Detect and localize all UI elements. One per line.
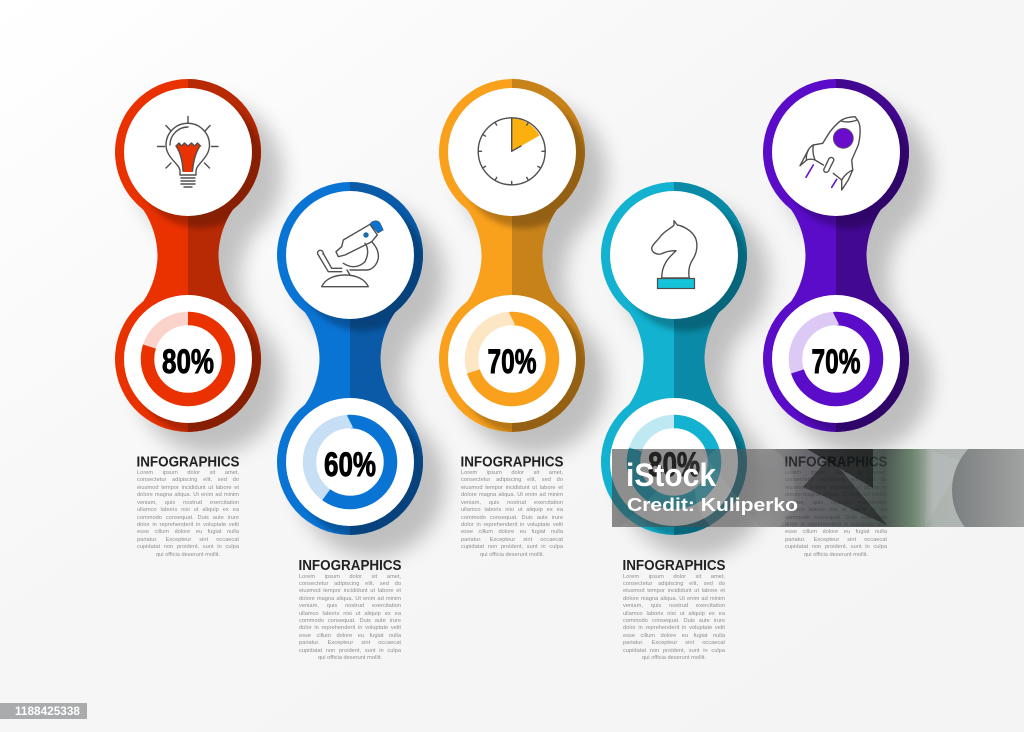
text block: consectetur adipiscing elit, sed do xyxy=(785,477,887,483)
text block: qui officia deserunt mollit. xyxy=(642,655,706,661)
text block: commodo consequat. Duis aute irure xyxy=(461,515,563,521)
text block: consectetur adipiscing elit, sed do xyxy=(299,581,401,587)
panel: orange column, clock, 70% xyxy=(439,72,607,562)
text block: veniam, quis nostrud exercitation xyxy=(623,603,725,609)
text block xyxy=(785,470,887,562)
text block: cupidatat non proident, sunt in culpa xyxy=(299,648,401,654)
donut chart: 60%: 60% xyxy=(324,446,376,484)
credit line: Credit: Kuliperko xyxy=(627,495,798,515)
text block: dolore magna aliqua. Ut enim ad minim xyxy=(137,492,239,498)
text block: esse cillum dolore eu fugiat nulla xyxy=(785,529,887,535)
text block: cupidatat non proident, sunt in culpa xyxy=(785,544,887,550)
text block: Lorem ipsum dolor sit amet, xyxy=(785,470,887,476)
iStock logo text: iStock xyxy=(626,457,716,493)
text block xyxy=(299,574,401,666)
text block: dolore magna aliqua. Ut enim ad minim xyxy=(623,596,725,602)
text block: dolor in reprehenderit in voluptate velit xyxy=(299,625,401,631)
text block: Lorem ipsum dolor sit amet, xyxy=(623,574,725,580)
text block: eiusmod tempor incididunt ut labore et xyxy=(623,588,725,594)
text block: eiusmod tempor incididunt ut labore et xyxy=(461,485,563,491)
text block: commodo consequat. Duis aute irure xyxy=(299,618,401,624)
donut chart: 60% xyxy=(310,422,390,502)
panel: red column, lightbulb, 80% xyxy=(115,72,283,562)
icon: clock xyxy=(478,118,545,185)
icon: lightbulb xyxy=(158,116,218,187)
text block: dolore magna aliqua. Ut enim ad minim xyxy=(299,596,401,602)
image id tag: 1188425338 xyxy=(15,706,81,718)
text block: ullamco laboris nisi ut aliquip ex ea xyxy=(623,611,725,617)
text block: veniam, quis nostrud exercitation xyxy=(461,500,563,506)
text block xyxy=(137,470,239,562)
text block: eiusmod tempor incididunt ut labore et xyxy=(785,485,887,491)
text block: pariatur. Excepteur sint occaecat xyxy=(299,640,401,646)
heading: INFOGRAPHICS xyxy=(460,454,564,470)
text block: pariatur. Excepteur sint occaecat xyxy=(785,537,887,543)
panel: teal column, chess knight, 80% xyxy=(601,175,769,666)
text block: qui officia deserunt mollit. xyxy=(156,552,220,558)
icon: rocket xyxy=(800,117,860,190)
text block xyxy=(461,470,563,562)
text block: veniam, quis nostrud exercitation xyxy=(137,500,239,506)
heading: INFOGRAPHICS xyxy=(622,558,726,574)
text block: esse cillum dolore eu fugiat nulla xyxy=(461,529,563,535)
donut chart: 80% xyxy=(634,422,714,502)
text block: pariatur. Excepteur sint occaecat xyxy=(137,537,239,543)
donut chart: 70%: 70% xyxy=(488,343,536,381)
text block: ullamco laboris nisi ut aliquip ex ea xyxy=(299,611,401,617)
text block: consectetur adipiscing elit, sed do xyxy=(461,477,563,483)
donut chart: 70% xyxy=(796,318,876,400)
text block: veniam, quis nostrud exercitation xyxy=(785,500,887,506)
donut chart: 80% xyxy=(148,318,228,400)
text block: consectetur adipiscing elit, sed do xyxy=(137,477,239,483)
text block: commodo consequat. Duis aute irure xyxy=(623,618,725,624)
text block: dolor in reprehenderit in voluptate velit xyxy=(785,522,887,528)
text block: consectetur adipiscing elit, sed do xyxy=(623,581,725,587)
text block xyxy=(623,574,725,666)
text block: dolore magna aliqua. Ut enim ad minim xyxy=(785,492,887,498)
text block: commodo consequat. Duis aute irure xyxy=(137,515,239,521)
text block: eiusmod tempor incididunt ut labore et xyxy=(137,485,239,491)
text block: esse cillum dolore eu fugiat nulla xyxy=(299,633,401,639)
icon: chess knight xyxy=(652,221,697,288)
text block: dolor in reprehenderit in voluptate velit xyxy=(461,522,563,528)
text block: esse cillum dolore eu fugiat nulla xyxy=(623,633,725,639)
text block: dolore magna aliqua. Ut enim ad minim xyxy=(461,492,563,498)
text block: cupidatat non proident, sunt in culpa xyxy=(137,544,239,550)
text block: commodo consequat. Duis aute irure xyxy=(785,515,887,521)
donut chart: 70% xyxy=(472,318,552,400)
heading: INFOGRAPHICS xyxy=(298,558,402,574)
text block: cupidatat non proident, sunt in culpa xyxy=(623,648,725,654)
text block: dolor in reprehenderit in voluptate velit xyxy=(137,522,239,528)
text block: veniam, quis nostrud exercitation xyxy=(299,603,401,609)
text block: Lorem ipsum dolor sit amet, xyxy=(461,470,563,476)
panel: purple column, rocket, 70% xyxy=(763,72,931,562)
image id tag xyxy=(0,703,87,719)
text block: pariatur. Excepteur sint occaecat xyxy=(623,640,725,646)
icon: microscope xyxy=(318,221,383,287)
text block: qui officia deserunt mollit. xyxy=(804,552,868,558)
text block: pariatur. Excepteur sint occaecat xyxy=(461,537,563,543)
text block: esse cillum dolore eu fugiat nulla xyxy=(137,529,239,535)
heading: INFOGRAPHICS xyxy=(784,454,888,470)
heading: INFOGRAPHICS xyxy=(136,454,240,470)
text block: Lorem ipsum dolor sit amet, xyxy=(299,574,401,580)
text block: ullamco laboris nisi ut aliquip ex ea xyxy=(785,507,887,513)
donut chart: 80%: 80% xyxy=(162,343,214,381)
text block: qui officia deserunt mollit. xyxy=(480,552,544,558)
watermark band xyxy=(612,449,1024,527)
text block: ullamco laboris nisi ut aliquip ex ea xyxy=(461,507,563,513)
text block: Lorem ipsum dolor sit amet, xyxy=(137,470,239,476)
text block: eiusmod tempor incididunt ut labore et xyxy=(299,588,401,594)
text block: dolor in reprehenderit in voluptate velit xyxy=(623,625,725,631)
donut chart: 80%: 80% xyxy=(648,446,700,484)
text block: qui officia deserunt mollit. xyxy=(318,655,382,661)
panel: blue column, microscope, 60% xyxy=(277,175,445,666)
text block: cupidatat non proident, sunt in culpa xyxy=(461,544,563,550)
text block: ullamco laboris nisi ut aliquip ex ea xyxy=(137,507,239,513)
donut chart: 70%: 70% xyxy=(812,343,860,381)
